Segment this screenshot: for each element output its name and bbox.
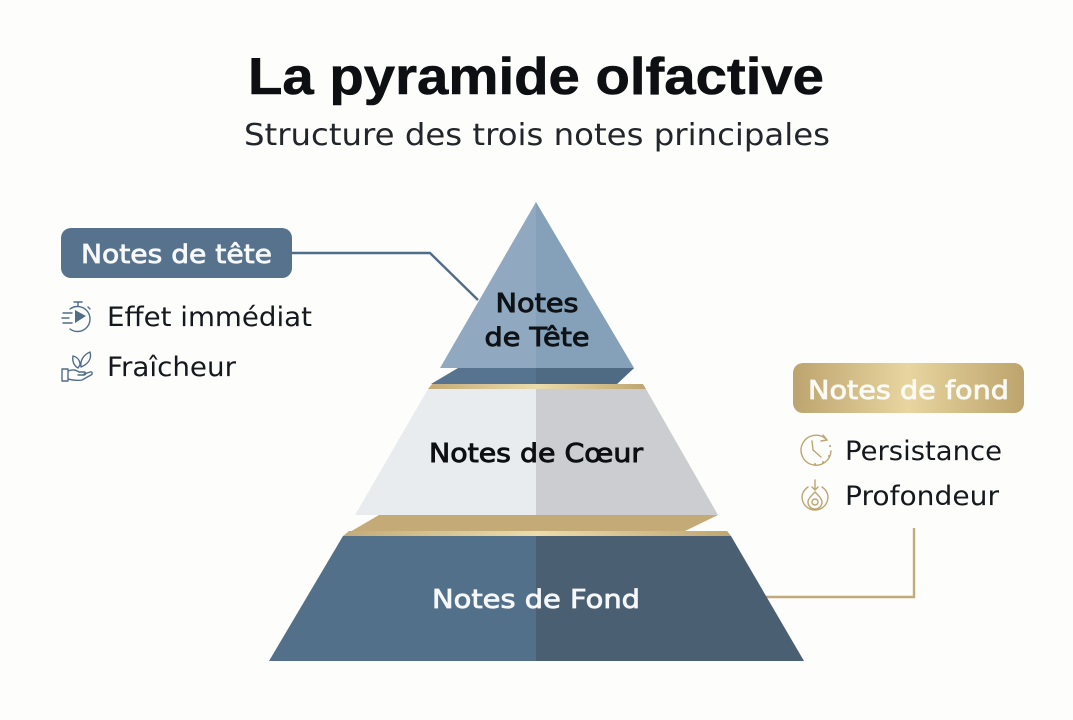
- tier: top notes: de Tête: [484, 323, 590, 353]
- item: fraîcheur: Fraîcheur: [107, 352, 237, 383]
- item: persistance: Persistance: [845, 436, 1002, 467]
- connector: base notes: [766, 528, 914, 597]
- icon: clock: [801, 435, 831, 465]
- icon: hand with leaves: [62, 352, 92, 381]
- label: notes de tête: [61, 228, 292, 278]
- connector: top notes: [292, 253, 478, 300]
- item: profondeur: Profondeur: [845, 481, 1000, 512]
- gold divider: upper: [428, 384, 646, 389]
- tier: heart notes: [355, 389, 718, 515]
- tier: top notes: [431, 202, 634, 384]
- item: effet immédiat: Effet immédiat: [107, 302, 312, 333]
- tier: top notes: Notes: [496, 289, 578, 319]
- subtitle: Structure des trois notes principales: [244, 118, 830, 153]
- label: notes de tête: Notes de tête: [81, 240, 272, 270]
- label: notes de fond: [793, 363, 1024, 413]
- tier: heart notes: Notes de Cœur: [429, 439, 643, 469]
- tier: base notes: Notes de Fond: [432, 585, 640, 615]
- panel: top notes: [61, 228, 312, 383]
- title: La pyramide olfactive: [248, 48, 824, 106]
- icon: drop with arrows: [802, 480, 828, 510]
- label: notes de fond: Notes de fond: [808, 376, 1009, 406]
- panel: base notes: [793, 363, 1024, 512]
- gold divider: lower: [343, 515, 731, 536]
- tier: base notes: [269, 536, 804, 661]
- pyramid: [269, 202, 804, 661]
- icon: stopwatch: [62, 302, 90, 332]
